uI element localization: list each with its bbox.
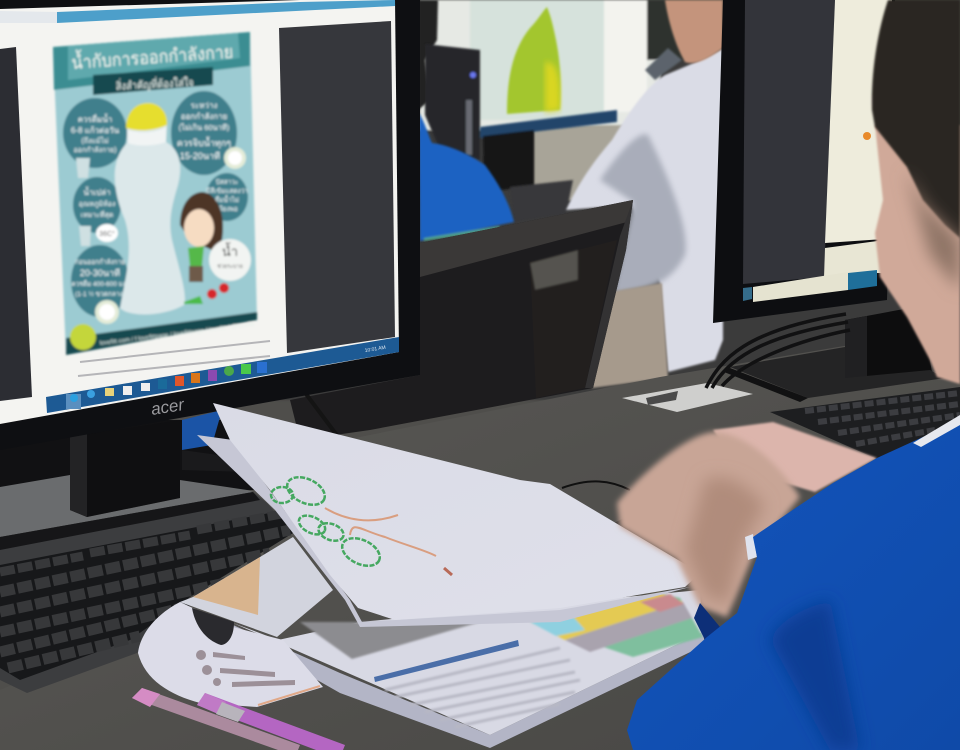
desk surface <box>0 345 960 750</box>
poster bubble: before exercise: 20-30นาที <box>80 268 120 278</box>
background person in white shirt <box>566 0 723 372</box>
browser tab strip <box>0 11 57 23</box>
right monitor <box>713 0 895 323</box>
black area and blue shirt behind left monitor <box>0 410 260 490</box>
right monitor taskbar search box <box>753 272 848 302</box>
poster bubble: during exercise: 15-20นาที <box>180 151 220 161</box>
student's blue shirt <box>627 420 960 750</box>
poster bubble: daily water: 6-8 แก้วต่อวัน <box>71 126 120 135</box>
poster bubble: during exercise: ออกกำลังกาย <box>181 112 227 121</box>
dark side panel left <box>0 47 32 401</box>
dark side panel right <box>279 21 395 353</box>
poster bubble: urine colour: เพียงพอ <box>216 205 238 213</box>
colourful illustration on page <box>530 593 703 657</box>
poster bubble: plain water: เหมาะที่สุด <box>81 210 113 219</box>
poster title banner: น้ำกับการออกกำลังกาย <box>71 39 234 73</box>
background person's cap <box>418 0 438 110</box>
page dark photo strip <box>300 622 480 659</box>
beige cabinet behind chair <box>592 283 668 388</box>
background computer tower <box>425 44 480 160</box>
tan page band <box>193 557 260 615</box>
loose paper sheets with drawing <box>197 403 700 627</box>
poster clock icon top <box>224 147 246 169</box>
pink folder <box>713 422 877 492</box>
poster bubble: daily water <box>63 98 127 178</box>
poster white circle callout: ช่วยระบาย <box>217 263 243 270</box>
poster bubble: plain water: น้ำเปล่า <box>83 186 111 197</box>
student's hand <box>617 432 800 617</box>
poster bubble: urine colour: มีสีเข้มแสดงว่า <box>206 187 248 195</box>
shirt cuff <box>694 534 757 640</box>
main sheet <box>213 403 700 620</box>
poster clock icon bottom <box>95 300 119 324</box>
white cable grommet <box>622 383 753 412</box>
poster bubble: plain water: 36C° <box>99 230 115 238</box>
office chair back <box>290 200 633 440</box>
poster bubble: plain water: อุณหภูมิห้อง <box>79 200 115 208</box>
under sheet <box>197 435 690 627</box>
collar stripe <box>913 415 960 447</box>
background monitor stand and keyboard <box>480 110 617 222</box>
poster bubble: daily water: ควรดื่มน้ำ <box>78 113 112 124</box>
right keyboard <box>770 387 960 459</box>
book thickness edge <box>233 625 705 748</box>
taskbar <box>46 337 399 413</box>
student's face and neck <box>875 125 960 384</box>
poster footer band <box>66 312 257 355</box>
poster: green banana shape on the wall <box>507 7 561 114</box>
poster cartoon girl <box>180 192 229 304</box>
poster title banner <box>68 33 240 80</box>
small caption lines under poster <box>78 341 270 376</box>
left monitor stand <box>70 420 180 517</box>
background: classroom wall <box>0 0 960 400</box>
pen two <box>197 693 345 750</box>
tablet shadow under hand <box>600 510 700 585</box>
page blue heading bar <box>374 640 519 682</box>
poster bubble: daily water: ออกกำลังกาย) <box>73 146 117 154</box>
taskbar: 10:01 AM <box>364 345 386 354</box>
poster subtitle banner: สิ่งสำคัญที่ต้องใส่ใจ <box>115 74 194 93</box>
pen one <box>132 688 300 750</box>
poster bubble: before exercise: (1-1 ½ ขวดกลาง) <box>75 290 125 298</box>
poster header band <box>53 32 250 90</box>
poster white circle callout <box>209 239 251 281</box>
screen white page <box>0 0 399 424</box>
mouse cable <box>562 481 630 490</box>
poster bubble: during exercise: ระหว่าง <box>191 101 217 110</box>
right monitor lower cream band <box>824 240 885 277</box>
left monitor base <box>0 475 253 537</box>
pink pens <box>132 688 345 750</box>
poster bubble: before exercise: ควรดื่ม 400-600 มล. <box>71 279 129 288</box>
poster bubble: before exercise <box>71 245 129 317</box>
tree drawing <box>271 472 452 575</box>
acer logo: acer <box>150 395 187 419</box>
dark shape on curled page <box>192 608 234 645</box>
grey list on curled page <box>196 650 295 687</box>
poster bubble: during exercise <box>171 91 237 175</box>
curled page wrap <box>180 537 333 637</box>
left monitor <box>0 0 420 450</box>
open workbook <box>138 537 705 748</box>
poster body <box>53 32 257 355</box>
book curled left page <box>138 602 323 707</box>
poster bubble: urine colour: ดื่มน้ำไม่ <box>215 195 239 204</box>
book right page <box>233 590 703 735</box>
poster bubble: during exercise: ควรจิบน้ำทุกๆ <box>177 136 231 149</box>
poster subtitle banner <box>93 67 213 95</box>
poster bubble: urine colour <box>206 173 248 221</box>
poster on screen <box>53 32 257 355</box>
background person in blue shirt <box>419 113 514 241</box>
right monitor taskbar icons <box>848 270 877 290</box>
poster bubble: before exercise: ก่อนออกกำลังกาย <box>75 258 125 266</box>
right monitor white page <box>825 0 892 243</box>
right monitor dark window panel <box>743 0 835 284</box>
left keyboard <box>0 492 293 693</box>
page body text lines <box>385 648 580 727</box>
orange stripe on curled page <box>258 686 320 705</box>
student's hair <box>872 0 960 290</box>
monitor cables <box>706 314 850 388</box>
black cable behind monitor <box>306 394 342 442</box>
poster bubble: daily water: (ถึงแม้ไม่ <box>81 136 109 145</box>
poster white circle callout: น้ำ <box>222 242 238 259</box>
poster bubble: urine colour: ปัสสาวะ <box>216 178 238 186</box>
poster bubble: plain water <box>73 177 121 246</box>
poster water bottle <box>115 103 185 314</box>
right monitor stand <box>724 306 945 402</box>
poster bubble: during exercise: (ไม่เกิน 60นาที) <box>179 123 230 132</box>
poster footer band: lovefitt.com / f lovefittpage / lovefittpage / lovefitt / @lovefitt <box>100 322 255 347</box>
